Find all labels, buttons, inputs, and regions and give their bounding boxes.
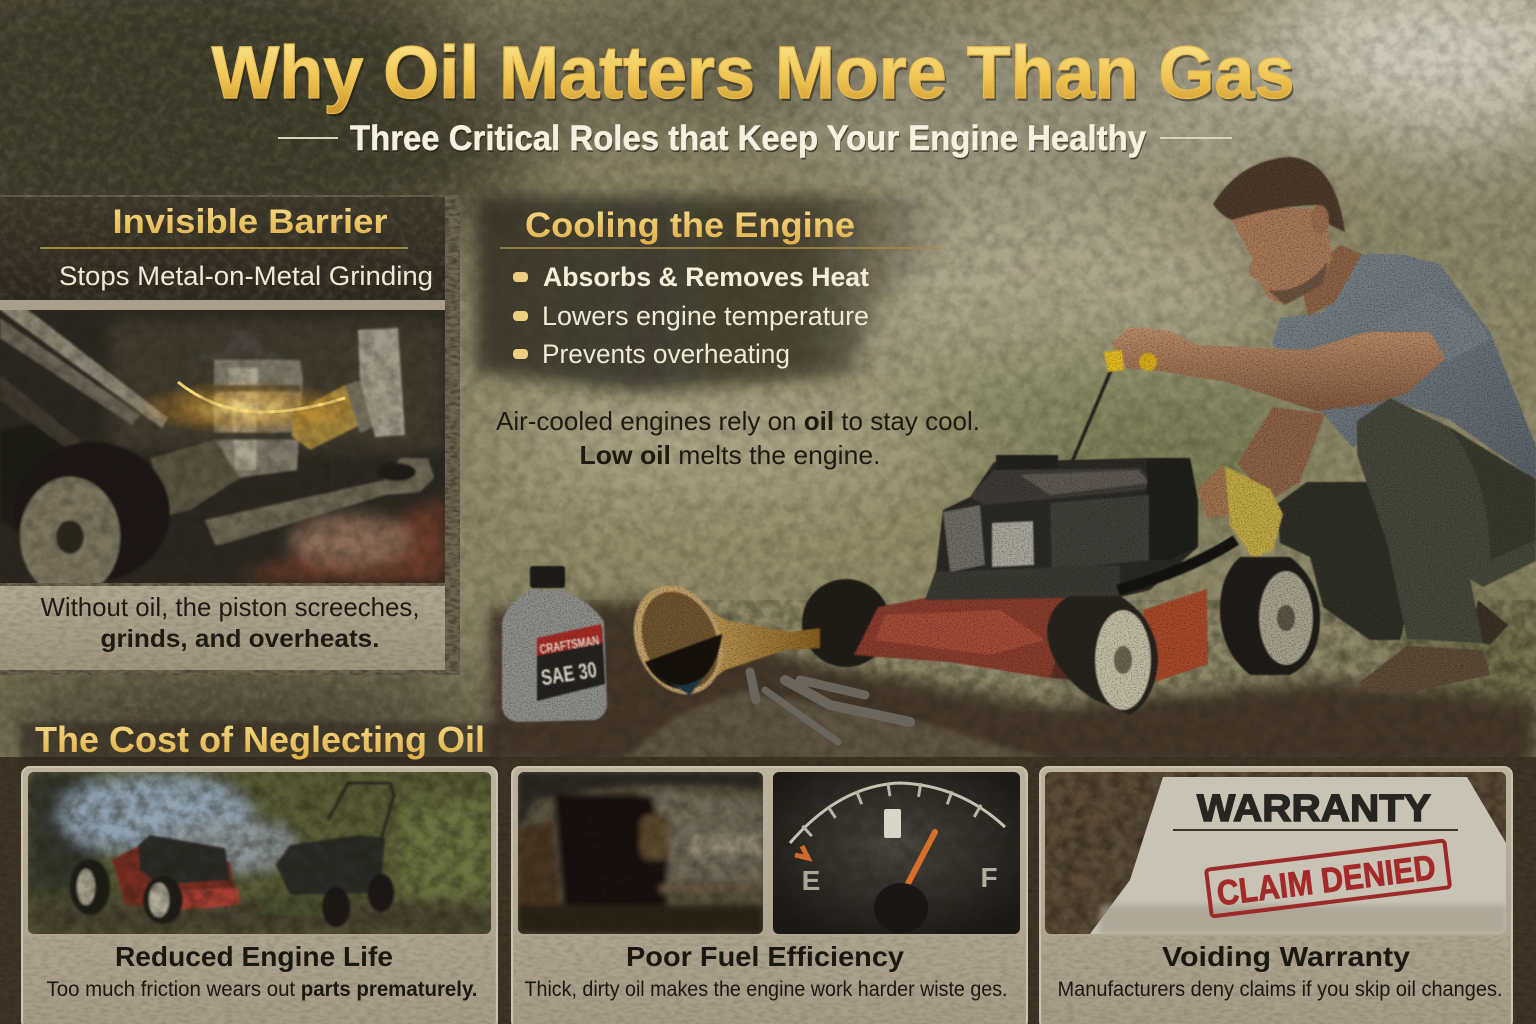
bullet list: Absorbs & Removes Heat	[543, 262, 869, 292]
oil bottle	[502, 566, 607, 722]
man checking oil	[1072, 157, 1536, 693]
illustration: fuel gauge: F	[980, 862, 998, 893]
ground: dirt strip	[490, 600, 1536, 770]
yellow rag	[1225, 466, 1283, 559]
man: far thigh and shin	[1277, 482, 1420, 640]
card: reduced engine life: Too much friction wears out parts prematurely.	[46, 978, 478, 1001]
illustration: fuel gauge	[773, 772, 1020, 934]
card: voiding warranty	[1040, 767, 1512, 1024]
lower hand	[1198, 464, 1233, 518]
man: neck	[1300, 245, 1362, 316]
panel header	[0, 197, 445, 300]
mower: left wheel	[802, 579, 890, 667]
mower: front wheel	[1047, 596, 1158, 715]
card: voiding warranty: Manufacturers deny claims if you skip oil changes.	[1058, 978, 1502, 1001]
bullet list	[513, 262, 869, 369]
card: reduced engine life	[22, 767, 497, 1024]
illustration: warranty document	[1045, 772, 1506, 934]
title: Why Oil Matters More Than Gas	[212, 31, 1294, 114]
panel: invisible barrier	[0, 195, 460, 675]
cooling note: Air-cooled engines rely on oil to stay cool.	[496, 406, 980, 436]
man: sleeve	[1370, 290, 1490, 361]
caption: grinds, and overheats.	[100, 625, 380, 653]
man: shirt	[1272, 254, 1536, 480]
card: reduced engine life: Reduced Engine Life	[115, 941, 393, 972]
illustration: fuel gauge: E	[802, 865, 820, 896]
man: back boot	[1470, 600, 1508, 645]
funnel with spilled oil	[618, 572, 820, 708]
mower: deck	[854, 597, 1075, 678]
mower: rear wheel	[1220, 557, 1320, 675]
man: raised arm	[1112, 327, 1447, 411]
stamp: claim denied: CLAIM DENIED	[1215, 848, 1438, 913]
bottle label	[537, 624, 605, 701]
card: poor fuel efficiency	[512, 767, 1027, 1024]
dipstick with yellow cap	[1072, 350, 1157, 462]
hand tools	[750, 672, 910, 742]
illustration: dirty oil on metal	[518, 772, 763, 934]
cooling note	[496, 406, 980, 470]
bullet list: Prevents overheating	[542, 339, 790, 369]
bullet list: Lowers engine temperature	[542, 301, 869, 331]
panel header: Stops Metal-on-Metal Grinding	[59, 261, 433, 291]
bottle label: CRAFTSMAN	[538, 632, 600, 657]
caption: Without oil, the piston screeches,	[40, 592, 420, 622]
mower: engine	[925, 455, 1198, 600]
illustration: smoking mowers	[28, 772, 491, 934]
lawn mower	[802, 455, 1320, 715]
subtitle with side rules: Three Critical Roles that Keep Your Engine Healthy	[351, 121, 1147, 160]
caption	[0, 586, 445, 670]
man: hair	[1213, 157, 1345, 232]
title: Why Oil Matters More Than Gas	[214, 34, 1296, 117]
illustration: warranty document: WARRANTY	[1197, 788, 1431, 830]
man: near leg trousers	[1357, 398, 1536, 643]
illustration: engine piston with sparks	[0, 310, 445, 583]
subtitle with side rules: Three Critical Roles that Keep Your Engine Healthy	[350, 119, 1146, 158]
card: voiding warranty: Voiding Warranty	[1162, 941, 1410, 972]
panel: cooling the engine	[476, 196, 950, 392]
bottle label: SAE 30	[539, 657, 598, 690]
cooling note: Low oil melts the engine.	[580, 440, 880, 470]
panel: cooling the engine: Cooling the Engine	[525, 206, 855, 245]
man: boot	[1360, 646, 1490, 693]
man: face	[1230, 205, 1332, 305]
card: poor fuel efficiency: Poor Fuel Efficiency	[626, 941, 904, 972]
section heading: cost of neglecting oil: The Cost of Neglecting Oil	[35, 719, 485, 760]
card: poor fuel efficiency: Thick, dirty oil makes the engine work harder wiste ges.	[524, 978, 1008, 1001]
man: lower arm	[1237, 407, 1325, 500]
man: ear	[1311, 205, 1329, 235]
mower: cover	[1143, 589, 1208, 682]
mower: cables	[1118, 540, 1236, 590]
panel header: Invisible Barrier	[112, 203, 388, 241]
